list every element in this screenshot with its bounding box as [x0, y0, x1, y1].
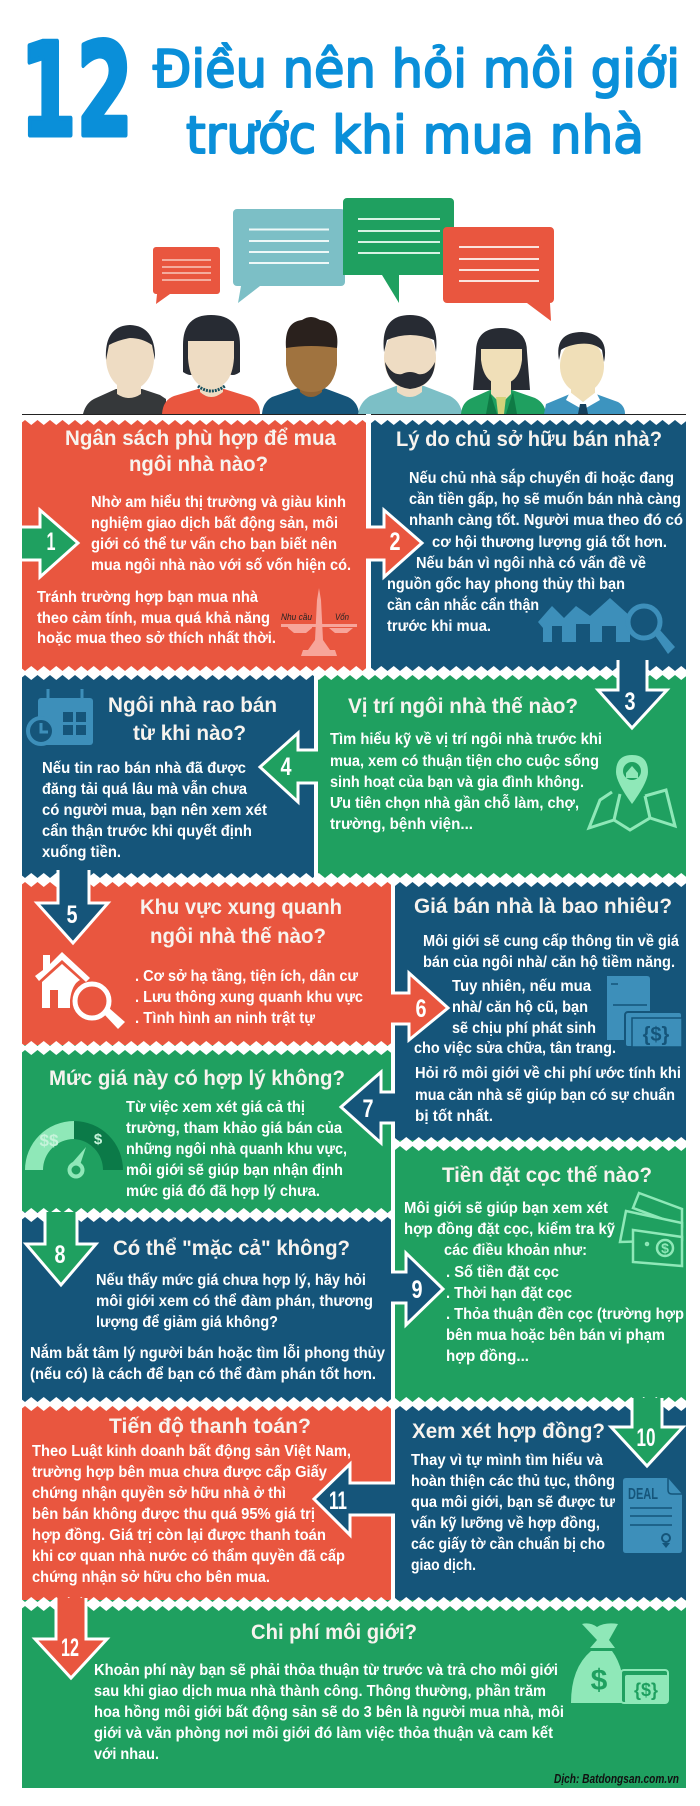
title line 1: Điều nên hỏi môi giới: [153, 40, 680, 100]
icon: money bag with banknotes: [571, 1623, 668, 1703]
icon: balance scale: [281, 588, 357, 656]
body 8: Nắm bắt tâm lý người bán hoặc tìm lỗi phong thủy: [30, 1343, 385, 1362]
body 6: sẽ chịu phí phát sinh: [452, 1020, 596, 1037]
body 1: nghiệm giao dịch bất động sản, môi: [91, 515, 338, 532]
body 2: nguồn gốc hay phong thủy thì bạn: [387, 576, 625, 593]
body 11: các giấy tờ cần chuẩn bị cho: [411, 1535, 605, 1553]
body 7: những ngôi nhà quanh khu vực,: [126, 1141, 347, 1158]
arrow 11: [314, 1464, 395, 1535]
body 4: trường, bệnh viện...: [330, 816, 473, 833]
body 3: Nếu tin rao bán nhà đã được: [42, 760, 246, 777]
body 10: hợp đồng. Giá trị còn lại được thanh toán: [32, 1527, 326, 1544]
body 11: hoàn thiện các thủ tục, thông: [411, 1473, 615, 1490]
body 9: . Số tiền đặt cọc: [446, 1264, 559, 1281]
body 6: [414, 933, 681, 1125]
panel 6: price: [395, 878, 686, 1145]
body 10: bên bán không được thu quá 95% giá trị: [32, 1506, 315, 1523]
heading 1: Ngân sách phù hợp để mua: [65, 426, 337, 450]
body 2: trước khi mua.: [387, 618, 491, 635]
arrow 3: [598, 660, 667, 728]
icon: calendar and clock: [28, 689, 93, 745]
panel 8: bargaining: [22, 1212, 391, 1404]
arrow 10: 10: [636, 1424, 656, 1452]
arrow 3: 3: [624, 688, 636, 716]
icon: map pin: [589, 755, 675, 830]
title: [20, 17, 680, 166]
body 4: Tìm hiểu kỹ về vị trí ngôi nhà trước khi: [330, 730, 602, 748]
panel 5: surrounding area: [22, 878, 391, 1050]
body 12: Khoản phí này bạn sẽ phải thỏa thuận từ trước và trả cho môi giới: [94, 1662, 558, 1679]
group of people: [83, 315, 625, 414]
heading 1: ngôi nhà nào?: [129, 452, 268, 476]
icon: house with magnifier: [35, 952, 125, 1029]
arrow 2: [366, 510, 422, 577]
icon: document with banknotes: {$}: [643, 1024, 670, 1046]
arrow 12: 12: [61, 1634, 79, 1662]
heading 5: ngôi nhà thế nào?: [150, 924, 326, 948]
body 8: (nếu có) là cách để bạn có thể đàm phán tốt hơn.: [30, 1365, 376, 1383]
body 10: [32, 1443, 351, 1586]
icon: houses with magnifier: [538, 598, 675, 654]
arrow 12: [35, 1598, 107, 1678]
panel 11: contract review: [395, 1404, 686, 1604]
body 6: Môi giới sẽ cung cấp thông tin về giá: [423, 933, 679, 950]
panel 3: listing date: [22, 672, 314, 878]
body 6: bán của ngôi nhà/ căn hộ tiềm năng.: [423, 954, 675, 971]
body 6: Hỏi rõ môi giới về chi phí ước tính khi: [415, 1065, 681, 1082]
body 7: môi giới sẽ giúp bạn nhận định: [126, 1162, 343, 1179]
body 9: bên mua hoặc bên bán vi phạm: [446, 1327, 665, 1344]
body 11: Thay vì tự mình tìm hiểu và: [411, 1451, 603, 1469]
body 8: Nếu thấy mức giá chưa hợp lý, hãy hỏi: [96, 1272, 366, 1289]
heading 10: Tiến độ thanh toán?: [109, 1414, 311, 1438]
body 10: chứng nhận quyền sở hữu nhà ở thì: [32, 1485, 286, 1502]
icon: deal document: [623, 1478, 682, 1553]
panel 7: is the price reasonable: [22, 1045, 391, 1217]
icon: money bag with banknotes: {$}: [634, 1680, 658, 1700]
arrow 9: [391, 1253, 443, 1325]
body 2: cần tiền gấp, họ sẽ muốn bán nhà càng: [409, 491, 681, 508]
person 1: [83, 325, 166, 414]
person 3: [262, 317, 359, 414]
icon: deal document: DEAL: [628, 1486, 658, 1503]
arrow 7: [341, 1072, 395, 1143]
body 2: cần cân nhắc cẩn thận: [387, 595, 539, 614]
body 9: hợp đồng đặt cọc, kiểm tra kỹ: [404, 1220, 615, 1238]
panel 4: location: [318, 672, 686, 878]
heading 7: Mức giá này có hợp lý không?: [49, 1066, 345, 1090]
bubble: teal: [233, 209, 345, 303]
panel 2: reason for selling: [371, 414, 686, 672]
body 10: trường hợp bên mua chưa được cấp Giấy: [32, 1464, 327, 1481]
icon: balance scale: Vốn: [335, 612, 349, 622]
arrow 7: 7: [362, 1095, 374, 1123]
heading 11: Xem xét hợp đồng?: [412, 1419, 605, 1443]
body 3: [42, 760, 268, 861]
body 12: với nhau.: [94, 1746, 159, 1763]
icon: price gauge: $: [94, 1131, 103, 1148]
body 2: Nếu chủ nhà sắp chuyển đi hoặc đang: [409, 468, 674, 487]
body 6: mua căn nhà sẽ giúp bạn có sự chuẩn: [415, 1086, 675, 1104]
body 2: nhanh càng tốt. Người mua theo đó có: [409, 512, 683, 529]
heading 8: Có thể "mặc cả" không?: [113, 1236, 350, 1260]
icon: balance scale: Nhu cầu: [281, 612, 312, 622]
body 1: Tránh trường hợp bạn mua nhà: [37, 589, 258, 606]
body 12: giới và văn phòng nơi môi giới đó làm việc thỏa thuận và cam kết: [94, 1725, 554, 1742]
title number 12: 12: [20, 17, 133, 166]
bubble: green: [343, 198, 454, 303]
panel 10: payment schedule: [22, 1404, 391, 1604]
arrow 1: [22, 510, 78, 577]
icon: money bag with banknotes: $: [591, 1664, 608, 1697]
heading 5: [140, 895, 342, 948]
panel 12: broker fees: [22, 1600, 686, 1788]
arrow 4: [260, 733, 318, 802]
body 6: Tuy nhiên, nếu mua: [452, 978, 591, 995]
body 4: Ưu tiên chọn nhà gần chỗ làm, chợ,: [330, 793, 579, 812]
heading 3: Ngôi nhà rao bán: [108, 693, 277, 717]
body 1: theo cảm tính, mua quá khả năng: [37, 610, 270, 627]
body 10: Theo Luật kinh doanh bất động sản Việt Nam,: [32, 1443, 351, 1460]
arrow 10: [611, 1398, 683, 1466]
body 3: có người mua, bạn nên xem xét: [42, 802, 268, 819]
body 1: Nhờ am hiểu thị trường và giàu kinh: [91, 493, 346, 511]
body 3: cẩn thận trước khi quyết định: [42, 822, 252, 840]
arrow 5: 5: [66, 901, 78, 929]
body 4: [330, 730, 602, 833]
body 7: Từ việc xem xét giá cả thị: [126, 1099, 305, 1116]
body 8: [30, 1272, 385, 1383]
body 12: [94, 1662, 564, 1763]
heading 5: Khu vực xung quanh: [140, 895, 342, 919]
body 11: vấn kỹ lưỡng về hợp đồng,: [411, 1515, 600, 1532]
body 1: [37, 493, 351, 647]
title line 2: trước khi mua nhà: [186, 106, 644, 166]
person 6: [544, 332, 625, 414]
heading 6: Giá bán nhà là bao nhiêu?: [414, 894, 672, 918]
person 2: [162, 315, 260, 414]
bubble: large red: [443, 227, 554, 321]
speech bubbles: [153, 198, 554, 321]
body 2: Nếu bán vì ngôi nhà có vấn đề về: [416, 555, 646, 572]
body 5: [135, 968, 363, 1027]
body 8: môi giới xem có thể đàm phán, thương: [96, 1292, 373, 1310]
body 8: lượng để giảm giá không?: [96, 1313, 278, 1331]
body 2: [387, 468, 683, 635]
arrow 4: 4: [280, 753, 292, 781]
arrow 6: 6: [416, 995, 426, 1023]
body 9: hợp đồng...: [446, 1348, 529, 1365]
arrow 8: [26, 1212, 96, 1285]
heading 4: Vị trí ngôi nhà thế nào?: [348, 694, 578, 718]
body 1: hoặc mua theo sở thích nhất thời.: [37, 630, 276, 647]
body 12: hoa hồng môi giới bất động sản sẽ do 3 bên là người mua nhà, môi: [94, 1704, 564, 1721]
body 11: [411, 1451, 615, 1574]
body 5: . Cơ sở hạ tầng, tiện ích, dân cư: [135, 968, 358, 985]
body 11: giao dịch.: [411, 1557, 476, 1574]
body 10: chứng nhận sở hữu cho bên mua.: [32, 1569, 270, 1586]
body 7: [126, 1099, 347, 1200]
icon: price gauge: [25, 1121, 123, 1176]
body 6: bị tốt nhất.: [415, 1108, 493, 1125]
arrow 5: [37, 870, 108, 943]
body 1: mua ngôi nhà nào với số vốn hiện có.: [91, 557, 351, 574]
body 9: các điều khoản như:: [444, 1242, 587, 1259]
bubble: small red: [153, 247, 220, 304]
arrow 9: 9: [412, 1276, 422, 1304]
body 9: . Thời hạn đặt cọc: [446, 1285, 572, 1302]
body 2: cơ hội thương lượng giá tốt hơn.: [432, 534, 667, 551]
heading 3: từ khi nào?: [133, 721, 246, 745]
body 3: xuống tiền.: [42, 844, 121, 861]
body 9: [404, 1200, 684, 1365]
heading 12: Chi phí môi giới?: [251, 1620, 417, 1644]
body 9: . Thỏa thuận đền cọc (trường hợp: [446, 1306, 684, 1323]
arrow 6: [391, 973, 448, 1040]
person 5: [461, 328, 546, 414]
body 6: cho việc sửa chữa, tân trang.: [414, 1040, 616, 1057]
heading 3: [108, 693, 277, 745]
body 11: qua môi giới, bạn sẽ được tư: [411, 1494, 615, 1511]
arrow 8: 8: [54, 1241, 66, 1269]
panel 1: budget: [22, 414, 366, 672]
body 7: mức giá đó đã hợp lý chưa.: [126, 1183, 320, 1200]
body 1: giới có thể tư vấn cho bạn biết nên: [91, 535, 337, 553]
heading 1: [65, 426, 337, 476]
icon: price gauge: $$: [40, 1131, 59, 1150]
person 4: [358, 315, 462, 414]
body 10: khi cơ quan nhà nước có thẩm quyền đã cấp: [32, 1547, 345, 1565]
arrow 1: 1: [46, 528, 56, 556]
body 3: đăng tải quá lâu mà vẫn chưa: [42, 779, 247, 798]
body 5: . Tình hình an ninh trật tự: [135, 1010, 315, 1027]
icon: banknotes: $: [661, 1240, 669, 1256]
icon: banknotes: [620, 1193, 682, 1266]
panel 9: deposit: [395, 1140, 686, 1404]
body 7: trường, tham khảo giá bán của: [126, 1120, 342, 1137]
body 4: sinh hoạt của bạn và gia đình không.: [330, 774, 584, 791]
heading 2: Lý do chủ sở hữu bán nhà?: [396, 427, 662, 451]
body 12: sau khi giao dịch mua nhà thành công. Thông thường, phần trăm: [94, 1683, 546, 1700]
arrow 11: 11: [329, 1487, 347, 1515]
arrow 2: 2: [390, 528, 400, 556]
body 9: Môi giới sẽ giúp bạn xem xét: [404, 1200, 609, 1217]
body 5: . Lưu thông xung quanh khu vực: [135, 989, 363, 1006]
heading 9: Tiền đặt cọc thế nào?: [442, 1163, 652, 1187]
body 4: mua, xem có thuận tiện cho cuộc sống: [330, 753, 599, 770]
icon: document with banknotes: [607, 976, 682, 1047]
body 6: nhà/ căn hộ cũ, bạn: [452, 999, 588, 1016]
